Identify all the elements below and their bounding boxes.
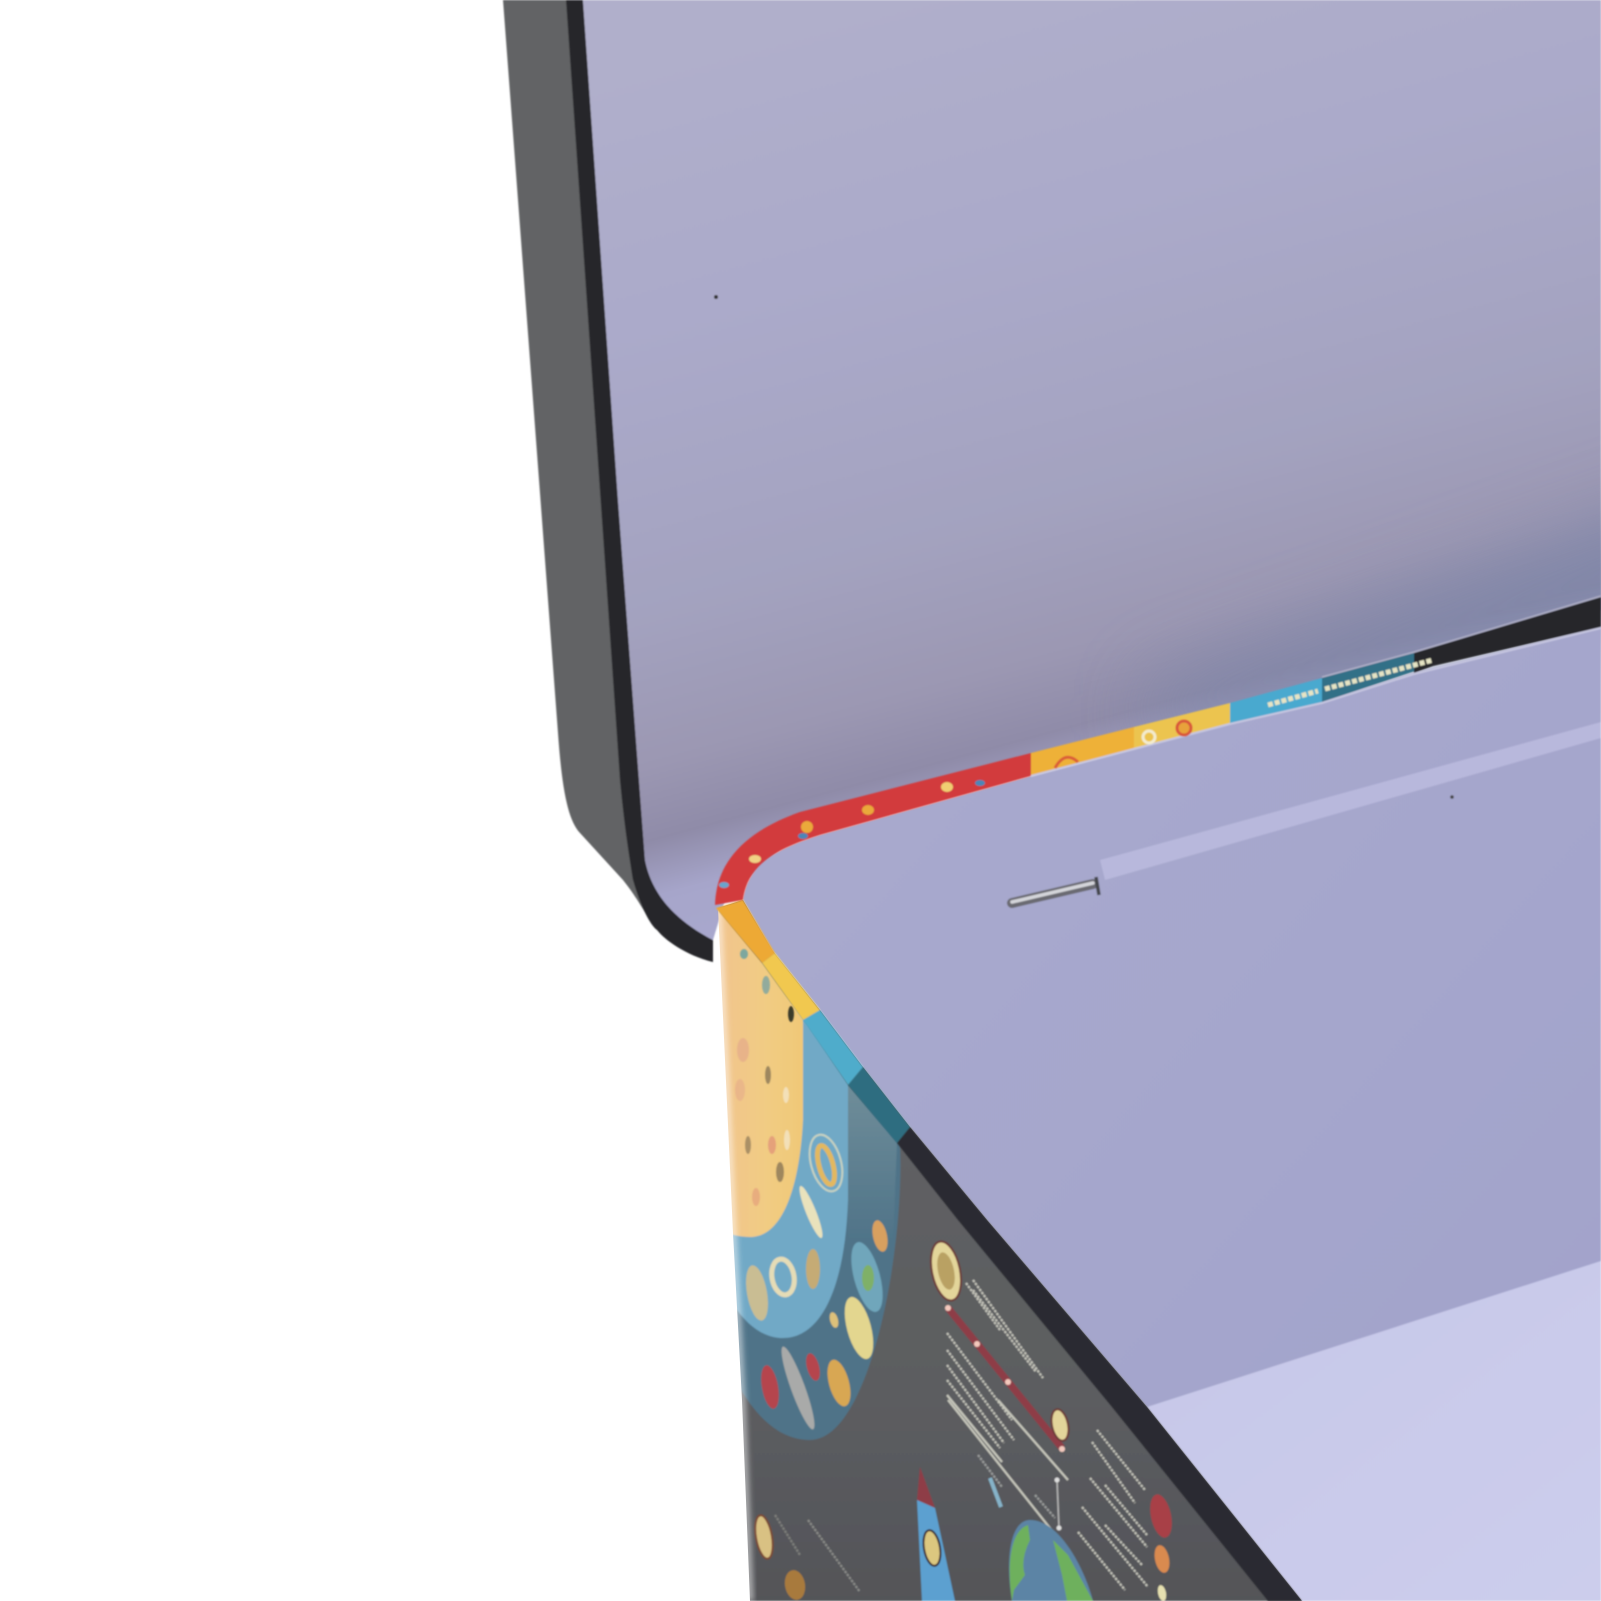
rim: red curved corner [715, 753, 1031, 905]
galaxies [742, 1131, 848, 1322]
lower planets [1149, 1494, 1173, 1538]
outer side panel of the box [710, 895, 1310, 1601]
dust speck [1450, 795, 1454, 799]
dust speck [714, 295, 718, 299]
side panel base [710, 895, 1310, 1601]
yellow sun zone [710, 900, 803, 1237]
rim highlight lines [1031, 628, 1601, 776]
interior of the box [743, 627, 1601, 1601]
pale rib on the wall [1100, 722, 1601, 880]
printed rolled rim [715, 596, 1601, 1601]
rim icons and lettering marks [719, 660, 1433, 888]
sun speckles [735, 1038, 790, 1206]
long pale rule lines [947, 1395, 1068, 1547]
planets [871, 1219, 889, 1253]
rim: side black section [897, 1127, 1302, 1601]
connector line [1054, 1478, 1062, 1530]
lid outer grey edge [503, 0, 713, 962]
blue orbit zone [733, 1002, 849, 1339]
rim: side yellow section [762, 953, 820, 1020]
lid inner lavender surface [583, 0, 1601, 940]
interior floor [1147, 1261, 1601, 1601]
rim: side orange section [716, 900, 775, 963]
rim: teal front section [1322, 653, 1433, 702]
earth [1009, 1520, 1093, 1601]
rim: side teal section [848, 1067, 910, 1143]
rim: yellow front section [1134, 703, 1230, 748]
lid of the box [503, 0, 1601, 962]
metal pin [1012, 877, 1099, 903]
interior back wall [743, 627, 1601, 1601]
rim: black front section [1414, 597, 1601, 673]
rim side marks [740, 949, 794, 1022]
dark blue orbit zone [737, 960, 901, 1440]
lid inner black edge [566, 0, 713, 962]
rim: orange front section [1031, 727, 1134, 776]
red timeline bar [945, 1305, 1071, 1452]
heading line on the side panel [1007, 1270, 1118, 1400]
darker lid shading at right above rim [1166, 484, 1601, 718]
blue caption marks [990, 1478, 1001, 1507]
photo: open tin box corner [502, 0, 1601, 1601]
left edge haze [718, 908, 750, 1601]
rim: blue front section [1230, 678, 1322, 723]
small copy lines [775, 1280, 1148, 1592]
rocket [917, 1467, 955, 1601]
shaded overlap strip [848, 1086, 897, 1200]
circular timeline badge [930, 1240, 962, 1302]
rim: side blue section [803, 1010, 863, 1085]
